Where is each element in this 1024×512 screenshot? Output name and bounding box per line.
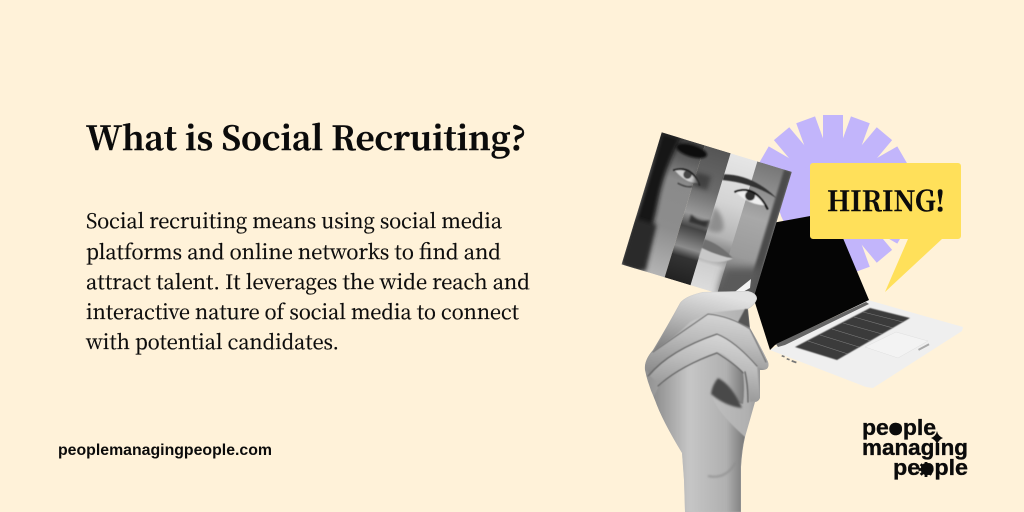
woman: brow [722, 174, 776, 198]
man: nose shadow [689, 214, 710, 228]
logo line 2: managing [862, 435, 968, 460]
laptop trackpad [865, 332, 928, 358]
bubble shape [810, 163, 961, 292]
logo sparkle [931, 431, 943, 445]
logo line 1: people [862, 415, 936, 440]
man: eye [672, 168, 700, 188]
bubble text: HIRING! [827, 180, 945, 220]
photo: composite face card [620, 132, 792, 309]
finger crevices [648, 314, 766, 402]
laptop [745, 212, 963, 388]
laptop screen [745, 212, 869, 350]
logo line 3: people [893, 455, 968, 480]
thumb base shadow [738, 309, 750, 328]
laptop ports [781, 343, 930, 363]
body text block: with potential candidates. [85, 326, 339, 355]
ring finger and palm [652, 352, 745, 512]
man: side of face [693, 172, 711, 190]
index finger [645, 314, 768, 372]
woman: nose [707, 207, 729, 235]
woman: eye [734, 188, 770, 210]
logo: people managing people [862, 415, 968, 480]
speech bubble [810, 163, 961, 292]
body text block: interactive nature of social media to connect [86, 296, 520, 325]
hand base [644, 291, 768, 512]
white collar [725, 282, 748, 306]
palm shadow [711, 378, 742, 408]
thumb [653, 291, 757, 352]
face stripes [622, 132, 792, 304]
laptop keyboard [795, 308, 910, 360]
logo flower [918, 462, 934, 477]
website url: peoplemanagingpeople.com [58, 442, 272, 459]
title: What is Social Recruiting? [86, 113, 526, 160]
woman: lips [702, 239, 732, 258]
middle finger [650, 333, 760, 402]
laptop hinge [776, 302, 869, 347]
logo dot [889, 423, 902, 435]
laptop base [770, 300, 963, 388]
body text block: attract talent. It leverages the wide reach and [86, 266, 530, 295]
hand holding photo [644, 291, 768, 512]
white card edge [736, 279, 751, 293]
woman: cheek and hairline edge [753, 170, 792, 294]
wrist crease [708, 466, 732, 478]
body text block: Social recruiting means using social media [86, 205, 502, 234]
body text block [85, 205, 530, 355]
man: dark hair and jaw side [622, 132, 681, 270]
man: eyebrow [676, 142, 708, 160]
body text block: platforms and online networks to find and [86, 236, 501, 265]
icon: purple sunburst [759, 115, 907, 274]
